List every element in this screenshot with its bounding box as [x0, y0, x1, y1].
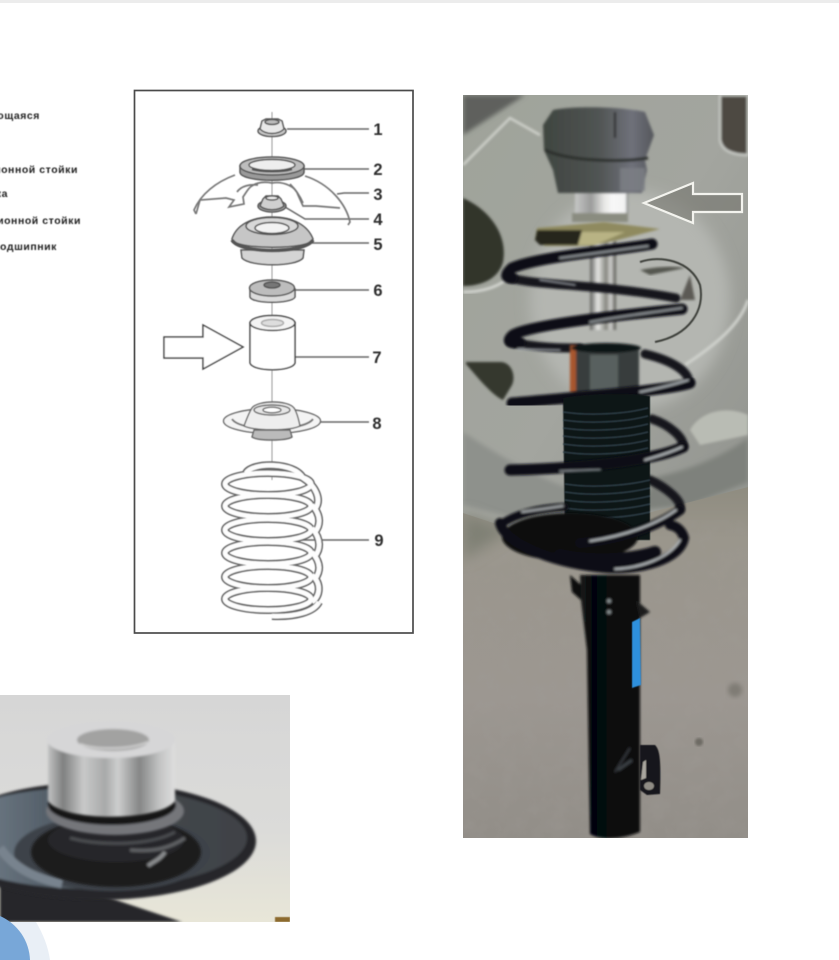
coil at dust sleeve height [512, 380, 690, 403]
shock absorber dust sleeve [570, 343, 641, 396]
part 5: strut mount [232, 217, 313, 265]
photo backdrop [0, 695, 290, 922]
part numbers: 5 [373, 236, 383, 254]
callout arrow: white outline pointing at sleeve [644, 183, 742, 223]
part numbers [372, 121, 384, 550]
panel: exploded parts diagram [134, 90, 413, 633]
cropped parts legend text [0, 110, 81, 253]
black spring seat plate [0, 782, 256, 900]
spring seat dark disc and lower coils [500, 447, 684, 569]
photo: assembled strut on wheel [463, 95, 748, 838]
piston rod [590, 240, 616, 330]
part 9: coil spring [225, 465, 319, 616]
callout arrow: pointing at spacer [164, 325, 243, 369]
coil spring back sections [510, 278, 689, 508]
blue paint mark [632, 618, 641, 688]
part 8: spring seat [224, 402, 320, 440]
watermark mark [275, 917, 290, 922]
part numbers: 8 [372, 415, 382, 433]
collar ring [46, 798, 185, 836]
part numbers: 1 [373, 121, 383, 139]
mounting bracket [640, 745, 660, 795]
coil spring front sections [507, 244, 682, 350]
silver spacer sleeve in photo [572, 190, 628, 222]
photo background: concrete floor [463, 487, 748, 838]
part numbers: 6 [373, 282, 383, 300]
part numbers: 4 [373, 211, 383, 229]
decorative blue circle corner [0, 916, 50, 960]
part 2: bearing washer [240, 157, 304, 180]
leader lines [285, 129, 369, 540]
spring seat plate [535, 222, 660, 246]
rubber strut top mount [543, 107, 654, 193]
part numbers: 3 [373, 186, 383, 204]
part 6: bump stop washer [250, 280, 295, 302]
rubber dome [31, 817, 201, 887]
threaded bellows [563, 394, 650, 540]
part 7: spacer sleeve [250, 316, 295, 370]
part numbers: 2 [373, 161, 383, 179]
part numbers: 9 [374, 532, 384, 550]
table shadow [0, 886, 182, 922]
part 4: lower nut [258, 196, 286, 212]
part 1: top nut [258, 119, 286, 136]
part numbers: 7 [372, 349, 382, 367]
strut lower tube [570, 575, 650, 838]
part 3: spring cap cover [194, 175, 350, 225]
photo: aluminium spacer on spring seat [0, 695, 290, 922]
aluminium cylinder [47, 722, 175, 817]
photo background: wheel [463, 95, 748, 565]
